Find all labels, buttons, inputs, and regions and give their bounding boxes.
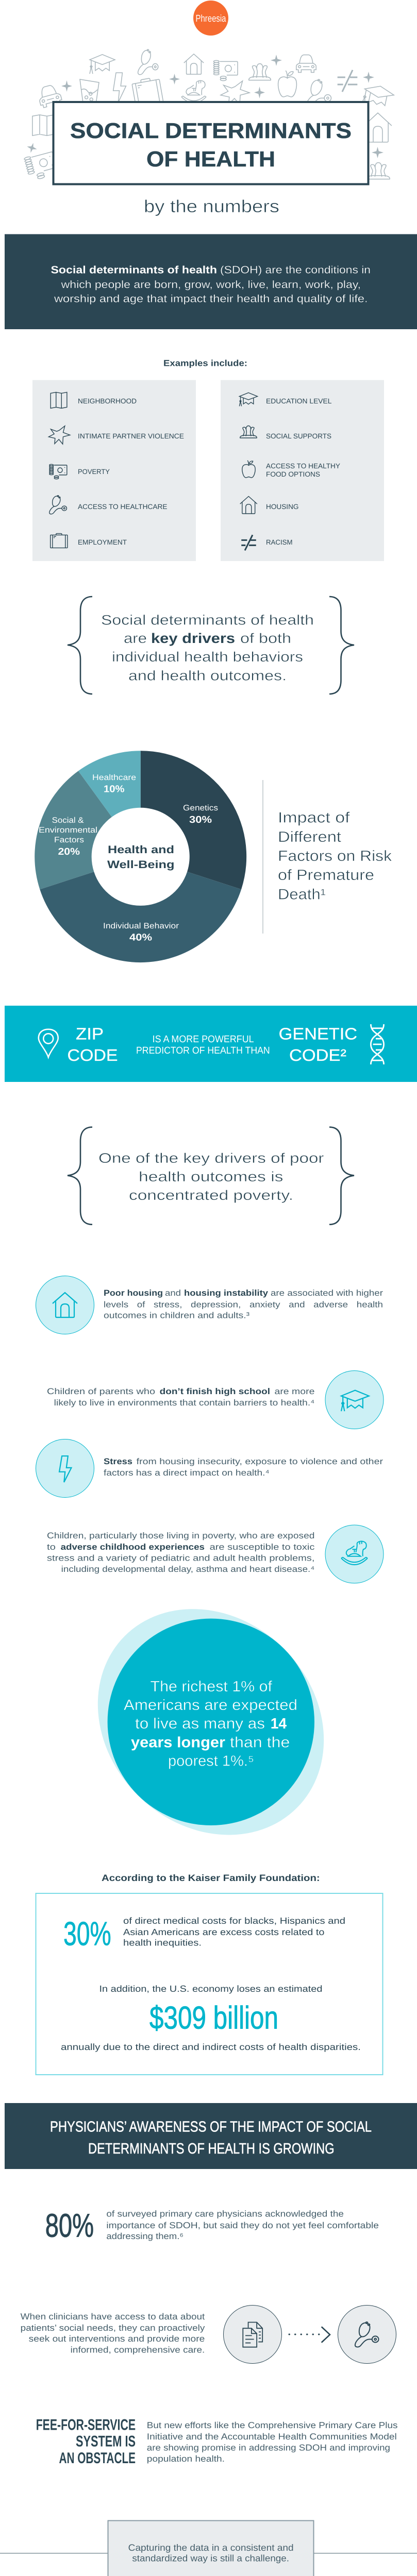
panel: definition banner	[5, 234, 417, 329]
panel: capturing data	[108, 2520, 313, 2576]
heading: fee for service: AN OBSTACLE	[59, 2450, 136, 2467]
center label: Well-Being	[107, 859, 174, 871]
callout: richest 1 percent	[52, 1563, 370, 1881]
callout: key drivers: of both	[240, 631, 291, 646]
callout: richest 1 percent: than the	[230, 1735, 290, 1751]
chart: donut of factors	[35, 751, 246, 962]
heading: chart caption: Factors on Risk	[278, 848, 392, 865]
text: clinicians: When clinicians have access to data about	[21, 2312, 205, 2321]
block: stress: from housing insecurity, exposure to violence and other	[137, 1457, 383, 1466]
icon: people	[240, 426, 257, 438]
title: OF HEALTH	[146, 147, 275, 171]
heading: fee for service: SYSTEM IS	[76, 2433, 136, 2450]
panel: zip code banner: CODE²	[289, 1046, 346, 1064]
block: adverse childhood experiences: adverse childhood experiences	[61, 1543, 205, 1552]
labels: Social &	[52, 816, 84, 825]
block: poor housing: Poor housing	[104, 1289, 163, 1298]
text: new efforts: But new efforts like the Comprehensive Primary Care Plus	[147, 2420, 397, 2430]
icon: dna	[371, 1024, 384, 1064]
text: clinicians: informed, comprehensive care.	[71, 2345, 205, 2355]
text: excess costs: of direct medical costs for blacks, Hispanics and	[123, 1916, 345, 1926]
panel: examples right	[221, 380, 384, 561]
heading: chart caption: Death¹	[278, 887, 326, 903]
text: new efforts: Initiative and the Accountable Health Communities Model	[147, 2432, 397, 2442]
panel: examples right: EDUCATION LEVEL	[266, 397, 332, 405]
panel: definition banner: which people are born, grow, work, live, learn, work, play,	[61, 279, 361, 291]
heading: Kaiser Family Foundation: According to the Kaiser Family Foundation:	[102, 1873, 320, 1883]
labels: 40%	[129, 933, 152, 943]
icon: burst	[48, 426, 70, 444]
connector lines and dot	[0, 2553, 417, 2576]
block: high school	[47, 1370, 383, 1429]
icon: house	[240, 496, 257, 514]
icon: lightning	[59, 1456, 71, 1482]
text: excess costs: Asian Americans are excess costs related to	[123, 1927, 325, 1937]
slice: genetics	[141, 751, 246, 889]
block: stress	[36, 1439, 383, 1497]
panel: zip code banner: IS A MORE POWERFUL	[153, 1034, 254, 1045]
panel: zip code banner: CODE	[67, 1046, 118, 1064]
stat: 80 percent: 80%	[45, 2207, 94, 2244]
icon: stethoscope	[338, 2305, 396, 2364]
panel: examples left: EMPLOYMENT	[78, 538, 127, 546]
center label: Health and	[108, 844, 174, 856]
callout: richest 1 percent: Americans are expected	[124, 1697, 297, 1714]
icon: house	[53, 1293, 77, 1317]
callout: richest 1 percent: poorest 1%.⁵	[168, 1753, 254, 1770]
callout: concentrated poverty: concentrated poverty.	[129, 1188, 293, 1203]
panel: examples left: INTIMATE PARTNER VIOLENCE	[78, 432, 184, 440]
heading: chart caption: Different	[278, 829, 341, 845]
text: annually: annually due to the direct and indirect costs of health disparities.	[61, 2042, 361, 2052]
block: adverse childhood experiences	[47, 1525, 383, 1583]
callout: key drivers: key drivers	[151, 631, 235, 646]
icon: map	[51, 392, 67, 408]
panel: examples right: HOUSING	[266, 503, 299, 511]
block: stress: Stress	[104, 1457, 132, 1466]
heading: chart caption: Impact of	[278, 810, 351, 826]
text: new efforts: population health.	[147, 2454, 225, 2464]
labels: 20%	[58, 846, 80, 857]
icon: briefcase	[51, 534, 68, 548]
panel: zip code banner	[5, 1006, 417, 1082]
panel: definition banner: (SDOH) are the conditions in	[220, 264, 371, 276]
icon: documents	[224, 2305, 281, 2364]
icon: rocking horse	[341, 1541, 368, 1565]
block: high school: likely to live in environments that contain barriers to health.⁴	[54, 1398, 314, 1408]
callout: richest 1 percent: to live as many as	[135, 1716, 265, 1732]
panel: Kaiser stats	[36, 1893, 382, 2075]
panel: capturing data: standardized way is still a challenge.	[132, 2553, 289, 2564]
block: poor housing: and	[165, 1289, 181, 1298]
slice: healthcare	[78, 751, 141, 817]
title: SOCIAL DETERMINANTS	[70, 118, 352, 143]
panel: definition banner: worship and age that impact their health and quality of life.	[54, 293, 368, 305]
panel: examples left	[32, 380, 196, 561]
text: clinicians: seek out interventions and provide more	[29, 2334, 205, 2344]
text: excess costs: health inequities.	[123, 1938, 202, 1948]
slice: individual behavior	[40, 872, 241, 962]
block: adverse childhood experiences: stress and a variety of pediatric and adult health problems,	[47, 1553, 314, 1563]
stat: 80 percent: of surveyed primary care physicians acknowledged the	[106, 2209, 344, 2219]
callout: richest 1 percent: years longer	[131, 1735, 225, 1751]
icon: not equal	[241, 535, 256, 550]
callout: key drivers: individual health behaviors	[112, 649, 303, 665]
heading: chart caption: of Premature	[278, 867, 374, 884]
block: high school: are more	[274, 1387, 314, 1396]
callout: concentrated poverty: health outcomes is	[139, 1169, 283, 1184]
block: adverse childhood experiences: to	[47, 1543, 56, 1552]
callout: key drivers	[68, 597, 354, 694]
labels: Environmental	[39, 826, 97, 835]
stat: 309 billion: $309 billion	[149, 2001, 278, 2036]
icon: apple	[242, 461, 255, 478]
panel: examples right: ACCESS TO HEALTHY	[266, 462, 340, 470]
icon: graduation cap	[341, 1391, 369, 1411]
callout: concentrated poverty: One of the key drivers of poor	[98, 1150, 324, 1166]
panel: examples left: POVERTY	[78, 468, 110, 476]
stat: 30 percent: 30%	[63, 1915, 111, 1953]
labels: Healthcare	[92, 773, 136, 782]
icon: graduation cap	[239, 393, 258, 406]
labels: Individual Behavior	[103, 922, 179, 930]
stat: 80 percent: importance of SDOH, but said they do not yet feel comfortable	[106, 2221, 379, 2230]
block: poor housing: are associated with higher	[271, 1289, 383, 1298]
block: poor housing: housing instability	[184, 1289, 269, 1298]
block: adverse childhood experiences: are susceptible to toxic	[210, 1543, 314, 1552]
block: stress: factors has a direct impact on health.⁴	[104, 1468, 270, 1478]
stat: 80 percent: addressing them.⁶	[106, 2231, 184, 2241]
block: adverse childhood experiences: including developmental delay, asthma and heart disease.⁴	[61, 1565, 314, 1574]
callout: richest 1 percent: 14	[271, 1716, 287, 1732]
slice: social and environmental	[35, 771, 112, 889]
callout: key drivers: and health outcomes.	[128, 668, 287, 684]
logo: Phreesia top: Phreesia	[196, 13, 226, 24]
text: excess costs	[123, 1916, 345, 1948]
icon cluster: hero outline icons	[24, 49, 395, 181]
heading: examples include: Examples include:	[163, 359, 247, 368]
block: high school: Children of parents who	[47, 1387, 155, 1396]
block: adverse childhood experiences: Children, particularly those living in poverty, who are exposed	[47, 1531, 314, 1540]
title	[54, 102, 368, 184]
callout: richest 1 percent: The richest 1% of	[151, 1679, 273, 1695]
heading: fee for service	[36, 2417, 136, 2467]
text: clinicians	[21, 2312, 205, 2355]
panel: definition banner: Social determinants of health	[51, 264, 217, 276]
panel: examples right: RACISM	[266, 538, 293, 546]
arrow	[289, 2327, 330, 2342]
callout: key drivers: are	[124, 631, 147, 646]
block: poor housing	[36, 1276, 383, 1334]
heading: fee for service: FEE-FOR-SERVICE	[36, 2417, 136, 2434]
callout: concentrated poverty	[68, 1127, 354, 1225]
text: new efforts: are showing promise in addressing SDOH and improving	[147, 2443, 390, 2453]
text: clinicians: patients’ social needs, they can proactively	[21, 2323, 205, 2333]
icon: location pin	[39, 1029, 58, 1057]
panel: physicians banner	[5, 2103, 417, 2169]
center label	[107, 844, 174, 871]
heading: chart caption	[263, 780, 392, 934]
panel: zip code banner: PREDICTOR OF HEALTH THAN	[136, 1045, 270, 1056]
labels: 10%	[104, 784, 125, 795]
text: economy: In addition, the U.S. economy loses an estimated	[99, 1984, 322, 1994]
panel: examples right: FOOD OPTIONS	[266, 470, 320, 478]
panel: examples left: ACCESS TO HEALTHCARE	[78, 503, 167, 511]
panel: zip code banner: ZIP	[76, 1025, 104, 1043]
labels: Genetics	[183, 804, 218, 812]
block: high school: don’t finish high school	[160, 1387, 270, 1396]
stat: 80 percent	[45, 2207, 379, 2244]
icon: safe and coins	[49, 464, 67, 479]
subtitle: by the numbers	[144, 197, 279, 216]
labels: Factors	[54, 836, 84, 844]
panel: examples right: SOCIAL SUPPORTS	[266, 432, 331, 440]
panel: capturing data: Capturing the data in a consistent and	[128, 2543, 294, 2553]
block: poor housing: outcomes in children and adults.³	[104, 1311, 250, 1320]
panel: zip code banner: GENETIC	[279, 1025, 357, 1043]
panel: physicians banner: DETERMINANTS OF HEALTH IS GROWING	[88, 2141, 335, 2157]
labels: 30%	[189, 815, 212, 825]
logo: Phreesia top	[193, 1, 228, 36]
callout: key drivers: Social determinants of health	[101, 613, 314, 628]
text: new efforts	[147, 2420, 397, 2464]
block: poor housing: levels of stress, depression, anxiety and adverse health	[104, 1300, 383, 1309]
icon: stethoscope	[49, 496, 66, 514]
panel: examples left: NEIGHBORHOOD	[78, 397, 137, 405]
labels	[39, 773, 218, 943]
